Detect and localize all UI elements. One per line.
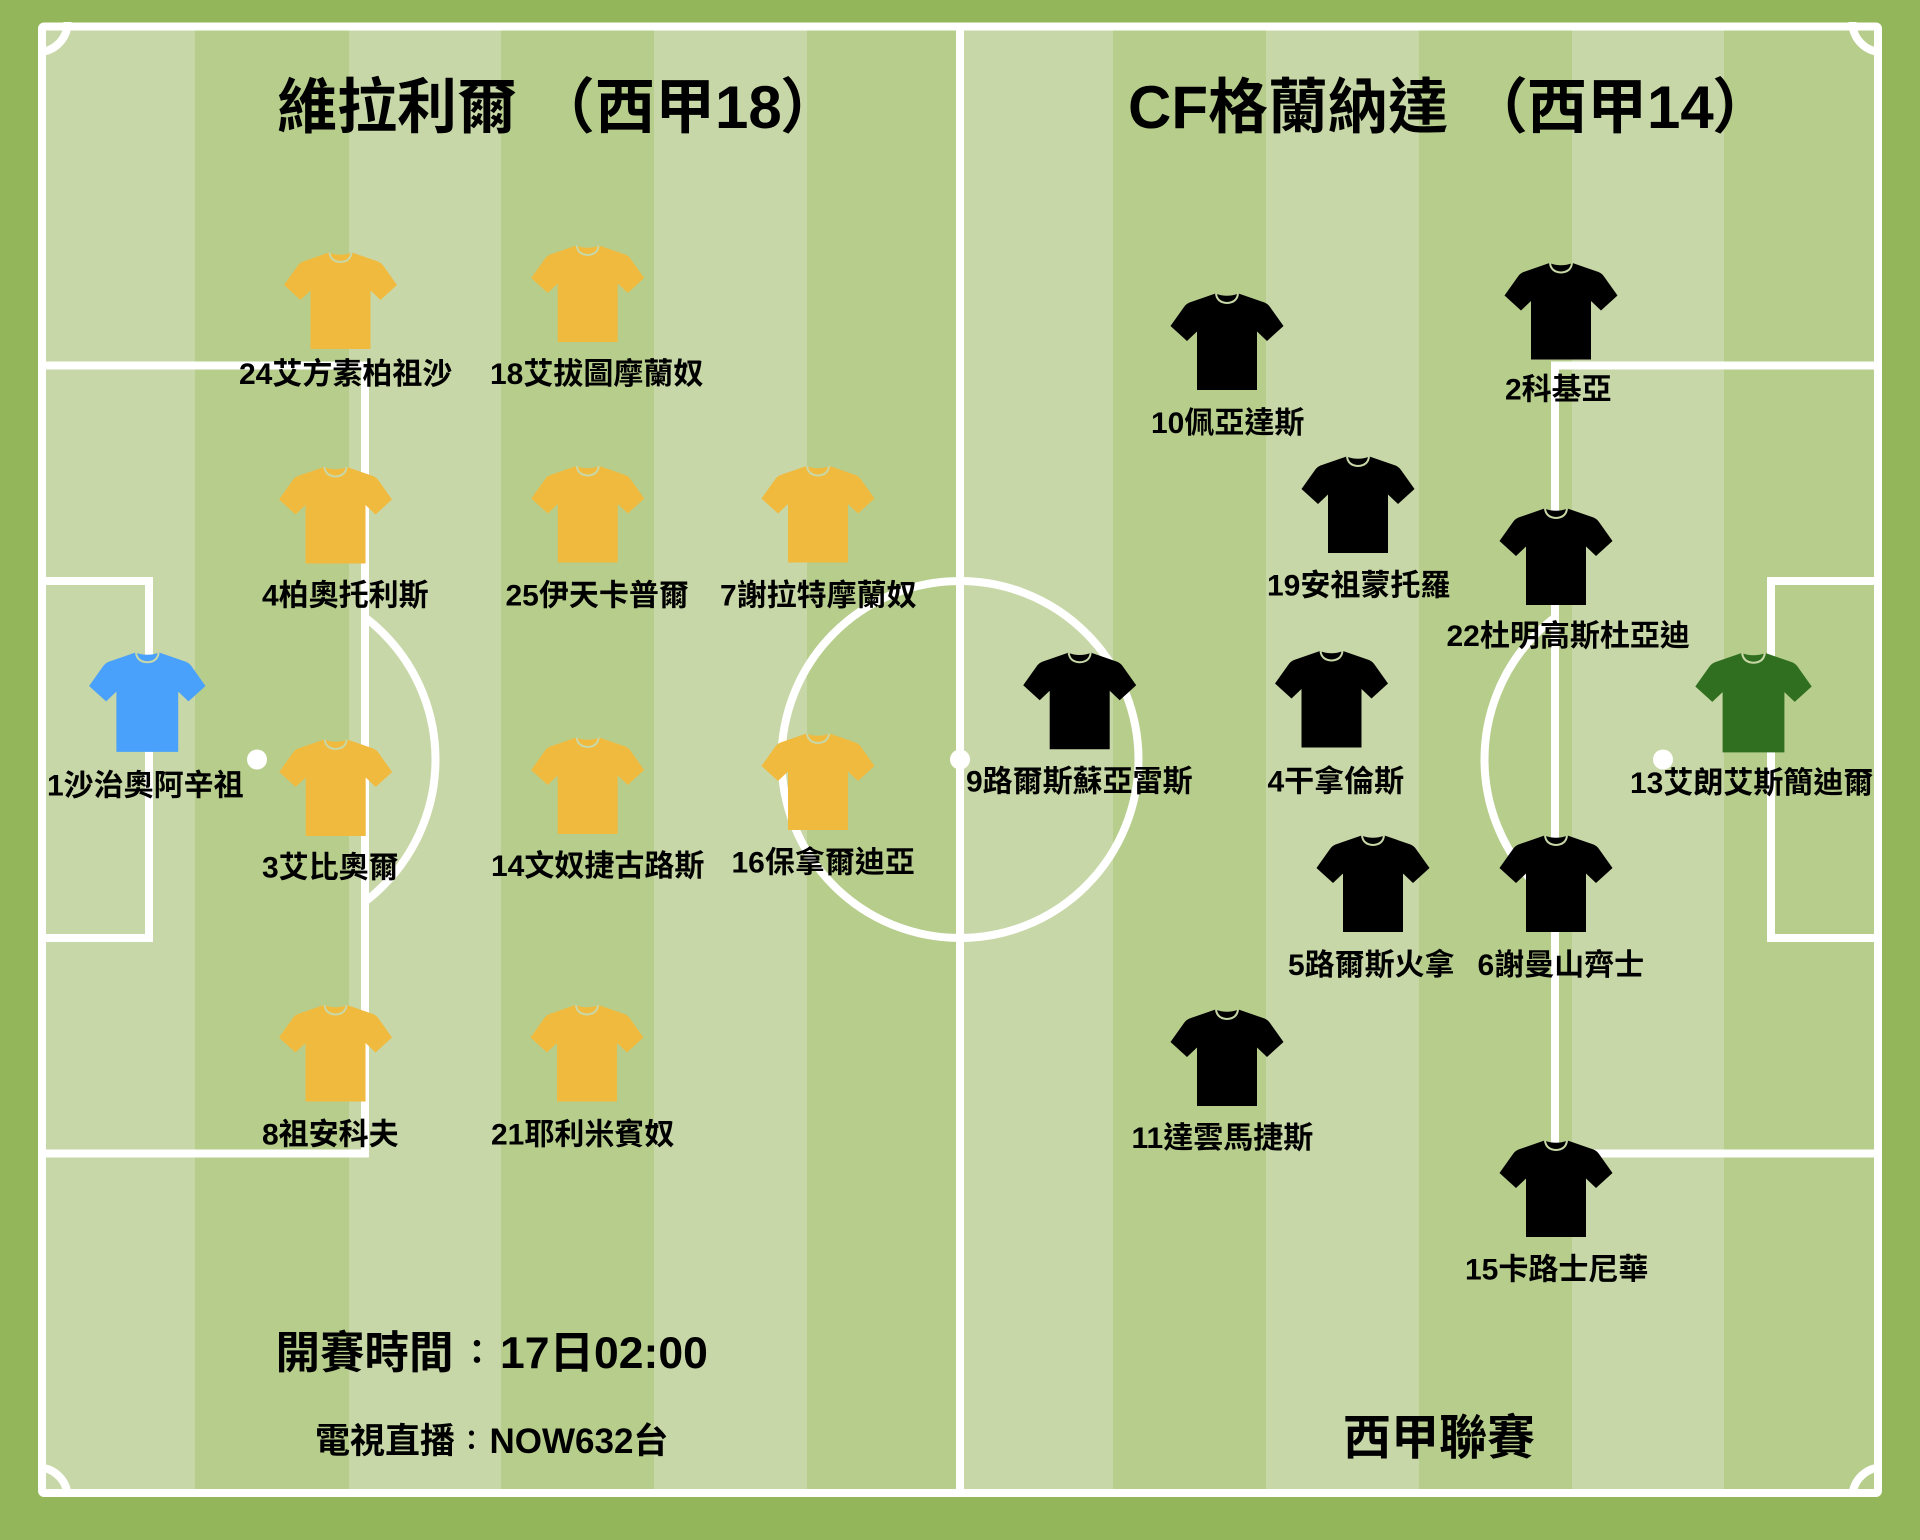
player: 11 (1132, 1010, 1313, 1155)
player: 1 goalkeeper: 1沙治奧阿辛祖 (47, 770, 244, 802)
player: 19 (1267, 456, 1450, 602)
tv broadcast: NOW632台 (490, 1422, 668, 1461)
player: 9 (966, 653, 1193, 799)
player: 4: 4柏奧托利斯 (262, 580, 429, 612)
kick-off time: 開賽時間 (276, 1329, 454, 1378)
title: home team: 西甲18 (595, 74, 782, 141)
player: 6: 6謝曼山齊士 (1478, 949, 1644, 982)
player: 25: 25伊天卡普爾 (506, 580, 689, 612)
player: 4: 4干拿倫斯 (1268, 765, 1404, 799)
player: 19: 19安祖蒙托羅 (1267, 570, 1450, 602)
player: 21 (491, 1005, 674, 1152)
player: 7 (720, 466, 917, 612)
league name: 西甲聯賽 (1343, 1412, 1535, 1465)
player: 7: 7謝拉特摩蘭奴 (720, 580, 917, 612)
player: 10 (1151, 294, 1304, 440)
player: 18: 18艾拔圖摩蘭奴 (490, 358, 703, 391)
player: 10: 10佩亞達斯 (1151, 407, 1304, 440)
title: away team: ） (1712, 74, 1772, 141)
title: home team: ） (780, 74, 840, 141)
player: 18 (490, 246, 703, 391)
player: 8: 8祖安科夫 (262, 1118, 399, 1152)
player: 6 (1478, 836, 1644, 982)
player: 13 goalkeeper: 13艾朗艾斯簡迪爾 (1630, 767, 1873, 800)
player: 14: 14文奴捷古路斯 (491, 850, 704, 883)
title: away team: 西甲14 (1527, 74, 1714, 141)
kick-off time: ： (460, 1334, 494, 1372)
player: 5: 5路爾斯火拿 (1288, 948, 1455, 982)
player: 2 (1504, 263, 1618, 406)
player: 24: 24艾方素柏祖沙 (239, 358, 452, 391)
player: 2: 2科基亞 (1505, 374, 1612, 406)
player: 3: 3艾比奧爾 (262, 852, 399, 884)
title: home team: （ (535, 74, 595, 141)
title: home team: 維拉利爾 (277, 74, 517, 141)
player: 1 goalkeeper (47, 652, 244, 802)
player: 16 (732, 734, 915, 880)
player: 9: 9路爾斯蘇亞雷斯 (966, 766, 1193, 799)
player: 15: 15卡路士尼華 (1465, 1254, 1648, 1286)
player: 8 (262, 1005, 399, 1152)
tv broadcast: ： (458, 1426, 485, 1456)
player: 4 (262, 467, 429, 612)
player: 22 (1446, 508, 1690, 653)
player: 14 (491, 738, 704, 883)
player: 25 (506, 466, 689, 612)
player: 3 (262, 740, 399, 884)
player: 5 (1288, 836, 1455, 982)
tv broadcast: 電視直播 (315, 1422, 455, 1461)
player: 21: 21耶利米賓奴 (491, 1118, 674, 1152)
player: 11: 11達雲馬捷斯 (1132, 1122, 1313, 1155)
player: 16: 16保拿爾迪亞 (732, 846, 915, 880)
title: away team: （ (1468, 74, 1528, 141)
player: 13 goalkeeper (1630, 653, 1873, 800)
player: 22: 22杜明高斯杜亞迪 (1446, 620, 1690, 653)
player: 24 (239, 252, 452, 391)
player: 4 (1268, 651, 1404, 799)
kick-off time: 17日02:00 (500, 1329, 708, 1378)
title: away team: CF格蘭納達 (1128, 74, 1448, 141)
player: 15 (1465, 1140, 1648, 1286)
